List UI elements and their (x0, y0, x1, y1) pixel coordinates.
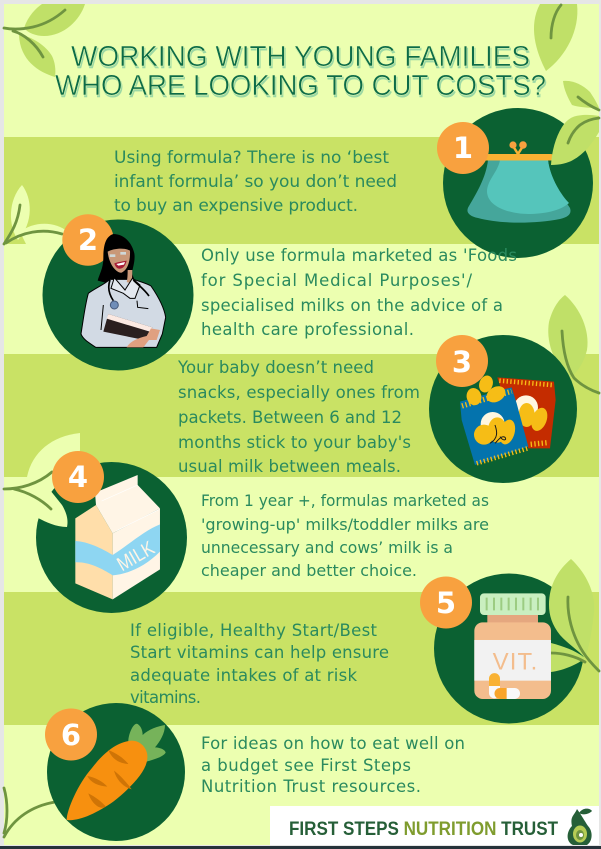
badge 3: 3 (452, 345, 472, 379)
text: step 4: unnecessary and cows’ milk is a (201, 538, 453, 557)
badge 4: 4 (68, 460, 88, 494)
leaf: right of step 5 (549, 559, 599, 672)
text: step 6: Nutrition Trust resources. (201, 777, 421, 796)
step 6 (4, 703, 465, 841)
step 2 (4, 185, 517, 370)
badge 1: 1 (453, 131, 473, 165)
text: step 1: Using formula? There is no ‘best (114, 148, 389, 168)
icon: purse (467, 141, 571, 223)
text: step 4: cheaper and better choice. (201, 561, 417, 580)
icon: doctor (81, 234, 166, 347)
text: step 3 (177, 358, 420, 476)
badge 6: 6 (61, 718, 81, 752)
heading: WORKING WITH YOUNG FAMILIES (71, 41, 530, 73)
heading (55, 41, 546, 102)
text: step 5 (130, 621, 389, 707)
circle 4 (36, 462, 187, 613)
step 4 (4, 433, 489, 613)
text: step 2 (201, 246, 517, 339)
leaves: right of step 1 (551, 81, 599, 165)
step 3 (177, 295, 599, 483)
icon: vitamin bottle: VIT. (493, 648, 537, 675)
text: step 4: 'growing-up' milks/toddler milks are (201, 515, 489, 534)
text: step 3: months stick to your baby's (178, 433, 411, 452)
circle 3 (429, 335, 577, 483)
badge 4 (52, 451, 104, 503)
step 1 (114, 81, 599, 258)
band 3 (4, 354, 599, 477)
circle 5 (434, 574, 584, 724)
leaves: left of step 2 (4, 185, 68, 244)
text: step 3: usual milk between meals. (178, 457, 401, 476)
badge 6 (45, 708, 97, 760)
text: step 6: For ideas on how to eat well on (201, 734, 465, 753)
badge 5: 5 (436, 586, 456, 620)
text: step 2: health care professional. (201, 320, 414, 339)
circle 2 (42, 220, 194, 370)
text: step 4 (201, 491, 489, 580)
text: step 2: specialised milks on the advice of a (201, 296, 503, 315)
step 5 (130, 559, 599, 724)
band 1 (4, 137, 599, 244)
logo: First Steps Nutrition Trust (270, 806, 599, 845)
badge 1 (437, 122, 489, 174)
text: step 5: If eligible, Healthy Start/Best (130, 621, 378, 640)
icon: carrot (67, 724, 166, 820)
text: step 6: a budget see First Steps (201, 756, 411, 775)
text: step 2: Only use formula marketed as 'Foods (201, 246, 517, 265)
leaves: bottom left (4, 788, 55, 837)
leaves: top left (4, 4, 85, 77)
icon: vitamin bottle (474, 593, 551, 699)
text: step 5: Start vitamins can help ensure (130, 643, 389, 662)
circle 6 (47, 703, 185, 841)
icon: pear (568, 809, 592, 845)
badge 3 (436, 335, 488, 387)
text: step 3: snacks, especially ones from (178, 383, 420, 402)
icon: chip packets (460, 374, 556, 465)
leaf: right of step 3 (548, 295, 599, 393)
leaves: top right (534, 4, 577, 71)
text: step 1: to buy an expensive product. (114, 196, 358, 216)
text: step 2: for Special Medical Purposes'/ (201, 271, 472, 290)
heading: WHO ARE LOOKING TO CUT COSTS? (55, 70, 546, 102)
icon: milk carton (75, 475, 160, 599)
text: step 5: vitamins. (130, 688, 201, 707)
text: step 4: From 1 year +, formulas marketed as (201, 491, 489, 510)
text: step 1 (114, 148, 397, 216)
text: step 3: packets. Between 6 and 12 (178, 408, 402, 427)
circle 1 (443, 108, 593, 258)
band 5 (4, 592, 599, 725)
text: step 3: Your baby doesn’t need (177, 358, 374, 377)
badge 5 (420, 576, 472, 628)
text: step 1: infant formula’ so you don’t need (114, 172, 397, 192)
icon: milk carton: MILK (113, 537, 159, 576)
logo wordmark: FIRST STEPS NUTRITION TRUST (289, 819, 558, 840)
text: step 6 (201, 734, 465, 796)
badge 2: 2 (78, 223, 98, 257)
badge 2 (62, 214, 114, 266)
leaves: left of step 4 (4, 433, 80, 527)
text: step 5: adequate intakes of at risk (130, 666, 357, 685)
